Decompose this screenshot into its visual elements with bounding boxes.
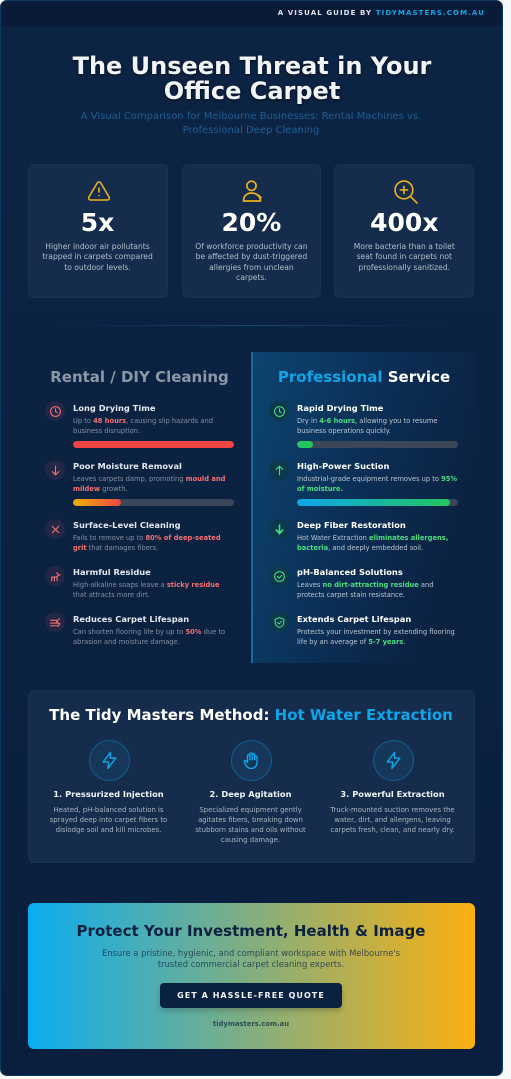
item text: Up to 48 hours, causing slip hazards and [73,417,213,425]
panel: stat 400x [334,164,474,298]
item text [73,581,220,599]
item title: Deep Fiber Restoration [297,520,406,530]
icon: hand [230,740,272,781]
column heading: Professional Service [278,368,450,386]
panel: stat 5x [28,164,168,298]
step text: agitates fibers, breaking down [198,816,303,824]
item: deep fiber restoration [269,519,448,552]
icon: cross [45,519,65,539]
icon: wear lines [45,612,65,632]
cta button [160,983,342,1008]
step text [195,806,306,844]
step title: 3. Powerful Extraction [340,788,445,798]
header label: A VISUAL GUIDE BY TIDYMASTERS.COM.AU [278,9,485,17]
icon: arrow up [269,460,289,480]
stat description: allergies from unclean [209,263,294,272]
item title: Rapid Drying Time [297,403,383,413]
item title: Harmful Residue [73,567,151,577]
cta text: Ensure a pristine, hygienic, and compliant workspace with Melbourne's [102,948,400,958]
step title: 2. Deep Agitation [210,788,291,798]
item text [297,417,438,435]
icon: residue [45,566,65,586]
item title: Extends Carpet Lifespan [297,614,411,624]
step text: stubborn stains and oils without [195,826,306,834]
item text [297,581,434,599]
cta text: trusted commercial carpet cleaning experts. [158,959,344,969]
icon: clock [45,401,65,421]
step text [50,806,167,834]
step text: water, dirt, and allergens, leaving [334,816,451,824]
step 2 [195,740,306,844]
panel: professional comparison [251,352,475,663]
stat description: carpets. [236,273,267,282]
item: reduces carpet lifespan [45,612,225,646]
stat description: seat found in carpets not [357,252,452,261]
step 1 [50,740,167,834]
progress bar [73,499,234,506]
subtitle: A Visual Comparison for Melbourne Businesses: Rental Machines vs. [81,111,421,122]
item: high-power suction [269,460,458,506]
progress bar [297,499,458,506]
step text: sprayed deep into carpet fibers to [50,816,167,824]
divider [61,325,441,326]
item title: Reduces Carpet Lifespan [73,614,189,624]
item text [297,628,455,646]
item text: mildew growth. [73,485,128,493]
item text: protects carpet stain resistance. [297,591,405,599]
item text [73,534,221,552]
method heading: The Tidy Masters Method: Hot Water Extraction [49,706,453,724]
item: ph-balanced solutions [269,566,434,599]
item text: business disruption. [73,427,140,435]
item: poor moisture removal [45,460,234,506]
title [72,52,432,106]
item title: Long Drying Time [73,403,155,413]
stat number: 400x [370,208,438,237]
stat description [354,242,455,272]
step title: 1. Pressurized Injection [53,788,164,798]
title: The Unseen Threat in Your [73,52,431,80]
item: surface-level cleaning [45,519,221,552]
stat number: 5x [81,208,114,237]
subtitle: Professional Deep Cleaning [183,125,319,136]
item title: Poor Moisture Removal [73,461,182,471]
progress bar [73,441,234,448]
step text: causing damage. [221,836,280,844]
panel: call to action [28,903,474,1049]
item: harmful residue [45,566,220,599]
cta heading: Protect Your Investment, Health & Image [77,922,425,940]
cta button: GET A HASSLE-FREE QUOTE [177,991,325,1000]
cta url: tidymasters.com.au [213,1020,289,1028]
title: Office Carpet [164,77,340,105]
step 3 [330,740,455,834]
stat description: More bacteria than a toilet [354,242,455,251]
item text [297,475,457,493]
column heading: Rental / DIY Cleaning [50,368,229,386]
step text: Specialized equipment gently [199,806,302,814]
item: long drying time [45,401,234,448]
icon: arrow down [45,460,65,480]
item text [73,417,213,435]
item text [73,475,225,493]
item text: Hot Water Extraction eliminates allergens, [297,534,448,542]
icon: warning triangle [88,181,110,201]
step text: Heated, pH-balanced solution is [53,806,164,814]
item text: Leaves carpets damp, promoting mould and [73,475,225,483]
stat description: be affected by dust-triggered [196,252,307,261]
step text: Truck-mounted suction removes the [330,806,455,814]
icon: magnifier plus [394,180,418,204]
item text: bacteria, and deeply embedded soil. [297,544,423,552]
icon: check circle [269,566,289,586]
item text: High-alkaline soaps leave a sticky residue [73,581,220,589]
item text: grit that damages fibers. [73,544,158,552]
stat description: Of workforce productivity can [195,242,308,251]
icon: bolt [88,740,130,781]
item text: of moisture. [297,485,343,493]
item text: Fails to remove up to 80% of deep-seated [73,534,221,542]
stat number: 20% [222,208,281,237]
item text: Can shorten flooring life by up to 50% due to [73,628,225,636]
panel: rental comparison [45,368,234,646]
stat description: to outdoor levels. [64,263,131,272]
stat description: trapped in carpets compared [42,252,153,261]
icon: person [242,180,262,202]
panel: stat 20% [182,164,321,298]
item title: Surface-Level Cleaning [73,520,181,530]
icon: clock [269,401,289,421]
stat description: professionally sanitized. [359,263,450,272]
item: rapid drying time [269,401,458,448]
item text: Dry in 4-6 hours, allowing you to resume [297,417,437,425]
item text [73,628,225,646]
stat description [42,242,153,272]
progress bar [297,441,458,448]
item text: Protects your investment by extending flooring [297,628,455,636]
item text: abrasion and moisture damage. [73,638,180,646]
cta text [102,948,400,969]
item text [297,534,448,552]
item text: business operations quickly. [297,427,391,435]
subtitle [80,111,421,136]
item title: pH-Balanced Solutions [297,567,403,577]
step text [330,806,455,834]
stat description [195,242,308,282]
item text: that attracts more dirt. [73,591,150,599]
item text: life by an average of 5-7 years. [297,638,405,646]
item text: Industrial-grade equipment removes up to 95% [297,475,457,483]
step text: dislodge soil and kill microbes. [56,826,161,834]
icon: bolt [372,740,414,781]
item title: High-Power Suction [297,461,389,471]
panel: method [28,690,474,863]
item text: Leaves no dirt-attracting residue and [297,581,434,589]
item: extends carpet lifespan [269,612,455,646]
stat description: Higher indoor air pollutants [45,242,150,251]
icon: down arrow [269,519,289,539]
step text: carpets fresh, clean, and nearly dry. [330,826,455,834]
icon: shield check [269,612,289,632]
header bar [0,0,503,26]
